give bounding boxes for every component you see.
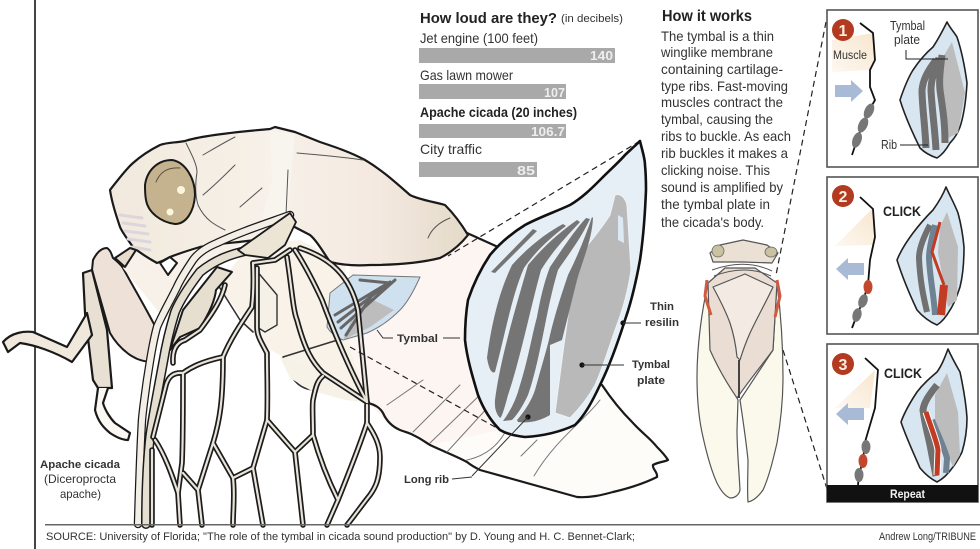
cicada side view [3, 127, 668, 525]
tymbal stage 1 [900, 22, 967, 158]
thin resilin label: Thin [650, 301, 674, 313]
red tymbal marks [705, 280, 780, 317]
wing hinge [238, 213, 296, 258]
small tymbal in body [327, 275, 420, 340]
tymbal plate label [890, 19, 948, 59]
step number 2 [832, 185, 854, 207]
small cicada top view [697, 240, 783, 502]
thorax collar [260, 131, 295, 225]
pale body behind wing [218, 240, 370, 405]
plate highlight [618, 215, 624, 243]
step number 3: 3 [839, 357, 848, 374]
bar: apache cicada [419, 104, 577, 139]
arrow left [836, 258, 864, 280]
neck pieces [115, 248, 136, 267]
tymbal plate label: plate [894, 33, 920, 47]
step number 1: 1 [839, 23, 848, 40]
species label [40, 459, 121, 501]
bar: apache cicada: 106.7 [531, 124, 565, 139]
muscle shading [835, 370, 875, 408]
front tarsus [3, 313, 92, 362]
chart title [420, 10, 623, 27]
bar: apache cicada: Apache cicada (20 inches) [420, 104, 577, 120]
species label: (Diceroprocta [44, 472, 116, 486]
thin resilin label: resilin [645, 317, 679, 329]
bar: jet engine [419, 30, 615, 63]
how it works text: ribs to buckle. As each [661, 128, 791, 144]
tymbal plate label: Tymbal [890, 19, 925, 33]
tymbal plate label: plate [637, 375, 665, 387]
wing veins [152, 248, 380, 525]
muscle label: Muscle [833, 50, 867, 62]
large tymbal [465, 141, 646, 476]
muscle [854, 358, 878, 485]
tymbal plate label: Tymbal [632, 359, 670, 371]
left rule [34, 0, 36, 549]
collar [712, 264, 772, 276]
panel 3 [827, 344, 978, 502]
left wing [697, 283, 740, 498]
head [710, 240, 778, 263]
tymbal label: Tymbal [397, 333, 438, 345]
tymbal label [377, 330, 460, 345]
chart title: (in decibels) [561, 13, 623, 25]
rib label: Rib [881, 138, 897, 152]
muscle shading [835, 208, 874, 246]
how it works text: How it works [662, 8, 752, 25]
eyes [712, 245, 777, 257]
muscle [851, 197, 875, 328]
thin resilin marker [620, 320, 626, 326]
bar chart: how loud [419, 10, 623, 178]
bar: jet engine: Jet engine (100 feet) [420, 30, 538, 46]
front femur [92, 248, 157, 362]
tymbal plate label [632, 359, 670, 387]
species label: apache) [60, 487, 101, 501]
long rib label: Long rib [404, 474, 449, 486]
abdomen [340, 233, 668, 497]
face bars [120, 215, 150, 250]
abdomen segment lines [387, 380, 600, 476]
panel 2 [827, 177, 978, 334]
thorax [708, 268, 777, 398]
step number 1 [832, 19, 854, 41]
diamond [160, 257, 177, 275]
bar: gas lawn mower: Gas lawn mower [420, 67, 513, 83]
repeat band: Repeat [890, 487, 925, 501]
tymbal membrane [465, 141, 646, 437]
how it works text: the cicada's body. [661, 214, 764, 230]
how it works text [660, 8, 791, 230]
panel 1 [827, 10, 978, 167]
abdomen outline [368, 385, 668, 497]
bar: jet engine: 140 [590, 48, 613, 63]
wing outer strip [138, 215, 290, 524]
how it works text: rib buckles it makes a [661, 145, 788, 161]
click label: CLICK [883, 203, 921, 219]
how it works text: The tymbal is a thin [661, 28, 774, 44]
species label: Apache cicada [40, 459, 121, 471]
arrow right [835, 80, 863, 102]
long rib marker [525, 414, 531, 420]
arrow left [836, 403, 864, 425]
chart title: How loud are they? [420, 10, 557, 27]
how it works text: containing cartilage- [661, 61, 783, 77]
bar: city traffic [419, 141, 537, 178]
how it works text: the tymbal plate in [661, 196, 770, 212]
how it works text: type ribs. Fast-moving [661, 78, 788, 94]
how it works text: clicking noise. This [661, 162, 770, 178]
thin resilin label [645, 301, 679, 329]
how it works text: muscles contract the [661, 94, 783, 110]
thorax and head [110, 127, 468, 265]
leg band [83, 270, 112, 388]
thorax underside line [218, 285, 360, 390]
eye highlights [166, 186, 185, 216]
mid tarsus [95, 388, 130, 440]
bar: city traffic: City traffic [420, 141, 482, 157]
wing beige band [146, 250, 250, 524]
pale wing membrane [280, 357, 367, 402]
tymbal plate [555, 194, 631, 418]
step number 3 [832, 353, 854, 375]
eye [145, 160, 195, 224]
how it works text: winglike membrane [660, 44, 773, 60]
how it works text: sound is amplified by [661, 179, 783, 195]
long rib label [404, 474, 472, 486]
source rule [45, 524, 980, 526]
wing base pieces [170, 267, 232, 350]
click label: CLICK [884, 365, 922, 381]
muscle shading [832, 33, 875, 72]
step number 2: 2 [839, 189, 848, 206]
bar: gas lawn mower [419, 67, 566, 100]
tymbal stage 2 [897, 187, 964, 325]
bar: city traffic: 85 [517, 163, 535, 178]
bar: gas lawn mower: 107 [544, 85, 565, 100]
source line: SOURCE: University of Florida; "The role of the tymbal in cicada sound production" by D. Young and H. C. Bennet-Clark; [46, 531, 635, 543]
plate marker [579, 362, 585, 368]
inner scutum [713, 274, 773, 360]
dashed zoom lines [350, 22, 828, 492]
repeat band [827, 485, 978, 502]
thorax fine lines [186, 137, 450, 238]
ribs [487, 217, 593, 422]
under-head connector [123, 238, 250, 320]
rib label [881, 138, 928, 152]
right wing [740, 283, 783, 502]
tymbal stage 3 [901, 349, 967, 482]
muscle [850, 23, 876, 155]
how it works text: tymbal, causing the [661, 111, 773, 127]
